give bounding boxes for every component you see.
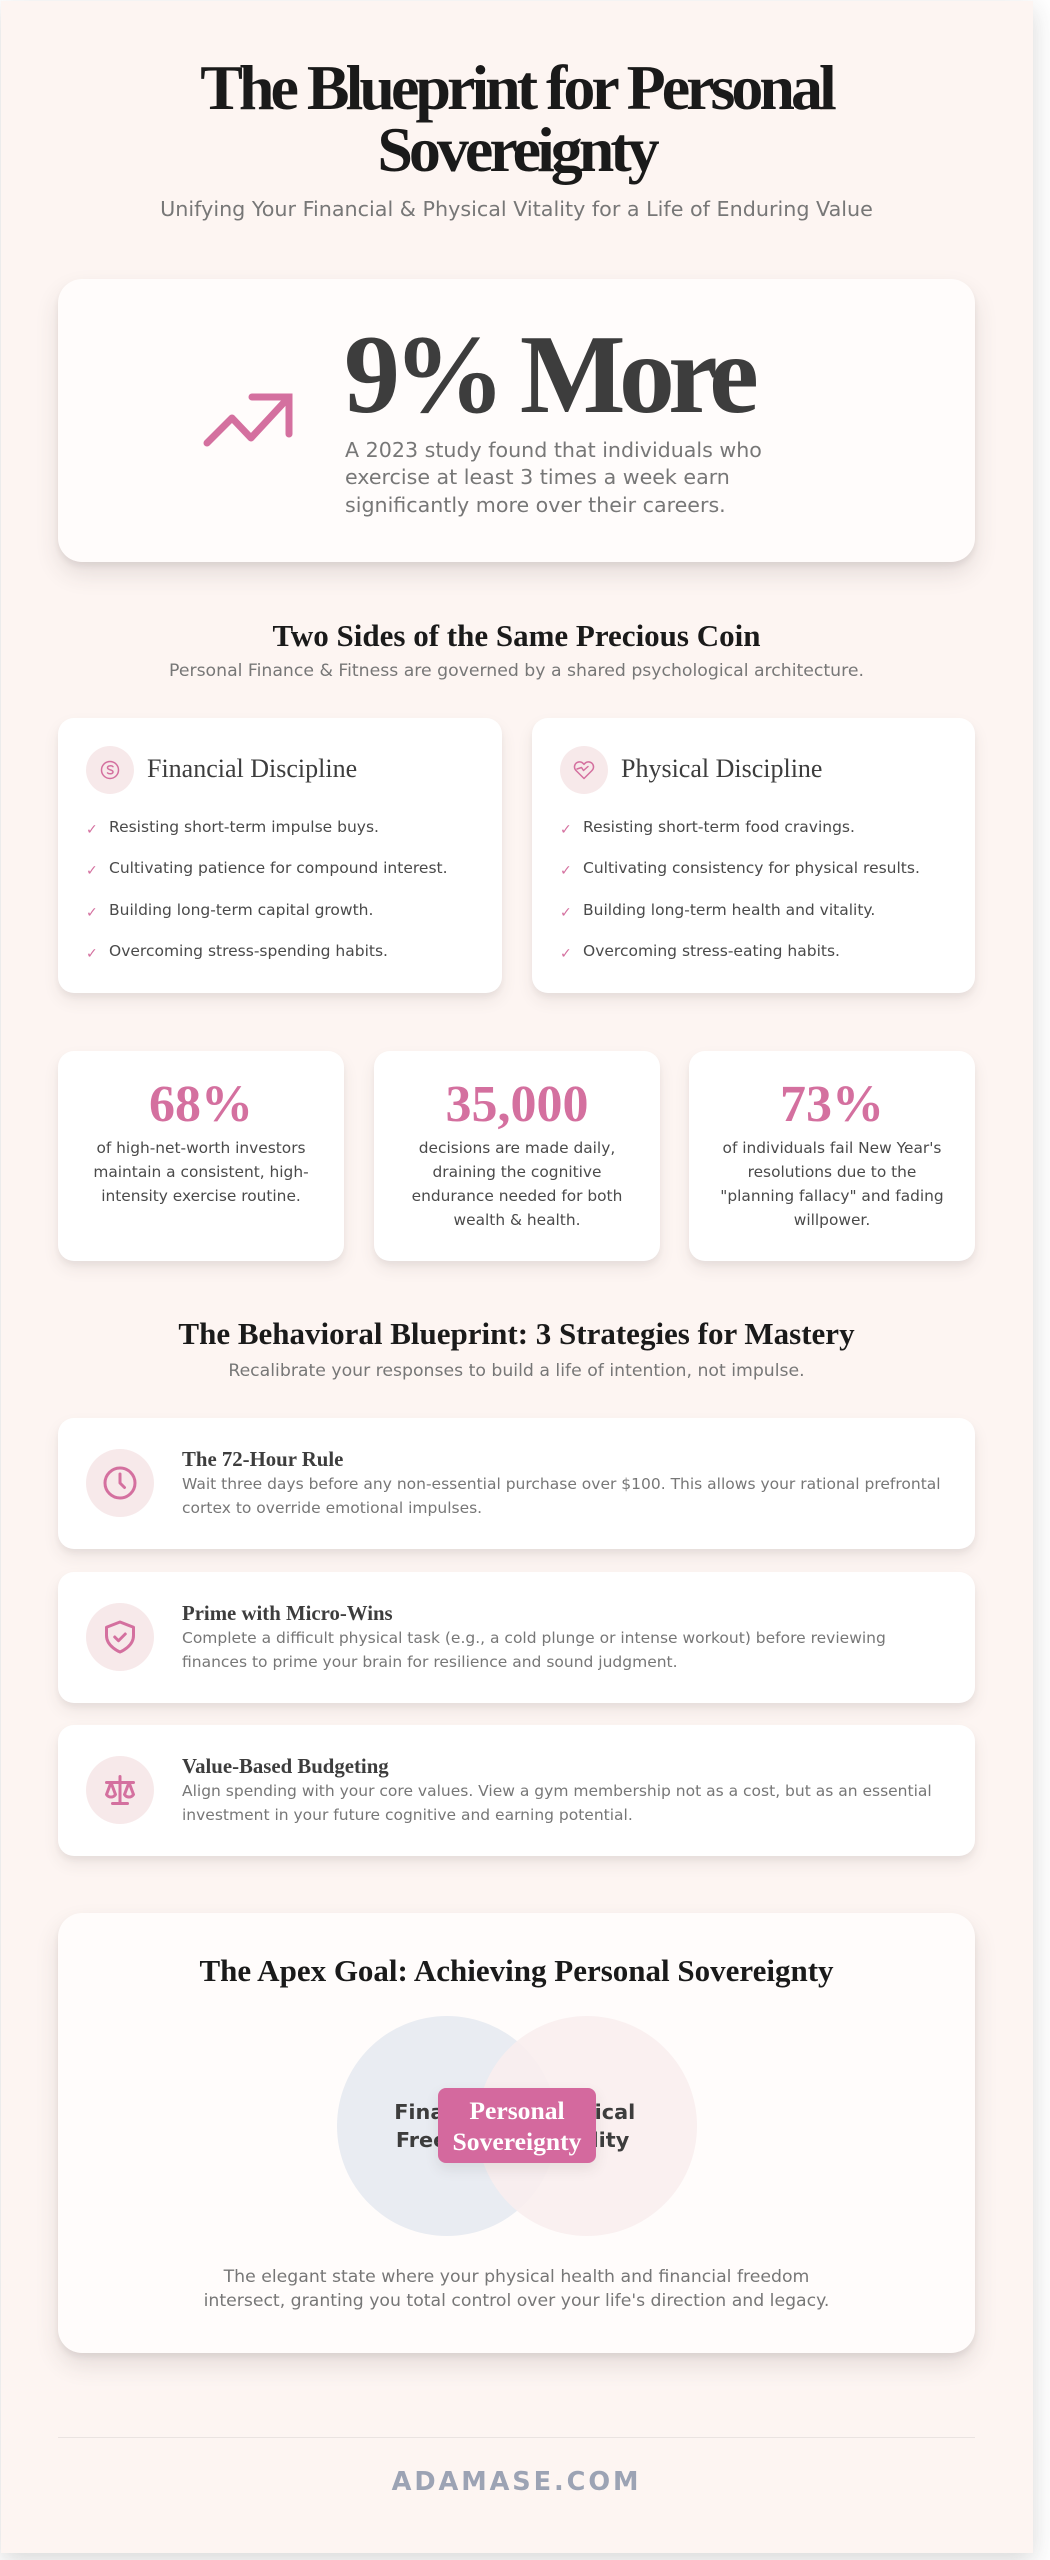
stat description: maintain a consistent, high- <box>93 1163 309 1181</box>
panel: financial discipline: ✓ <box>86 863 98 879</box>
checklist: Building long-term health and vitality. <box>583 901 875 919</box>
checklist: Building long-term capital growth. <box>109 901 373 919</box>
panel: physical discipline: ✓ <box>560 946 572 962</box>
stat description <box>93 1139 309 1205</box>
panel: physical discipline: ✓ <box>560 822 572 838</box>
panel: financial discipline <box>58 718 502 993</box>
subheading: strategies: Recalibrate your responses to build a life of intention, not impulse. <box>228 1361 805 1381</box>
stat card: 68% <box>58 1051 344 1261</box>
title <box>200 52 836 185</box>
stat description: resolutions due to the <box>748 1163 916 1181</box>
stat description: intensity exercise routine. <box>101 1187 301 1205</box>
card heading: Financial Discipline <box>147 754 357 783</box>
panel: financial discipline: ✓ <box>86 905 98 921</box>
heading: strategies: The Behavioral Blueprint: 3 Strategies for Mastery <box>178 1316 855 1351</box>
stat description: of individuals fail New Year's <box>723 1139 941 1157</box>
venn circle: financial freedom <box>337 2016 557 2236</box>
subheading: two sides: Personal Finance & Fitness are governed by a shared psychological architecture. <box>169 661 864 681</box>
card heading: Physical Discipline <box>621 754 822 783</box>
footer brand: ADAMASE.COM <box>392 2467 641 2497</box>
stat description: endurance needed for both <box>412 1187 622 1205</box>
venn centre badge <box>438 2088 596 2163</box>
checklist: Cultivating consistency for physical results. <box>583 859 920 877</box>
icon: clock <box>86 1449 154 1517</box>
hero number: 9% More <box>344 313 752 437</box>
panel: physical discipline <box>532 718 975 993</box>
strategy description: Wait three days before any non-essential purchase over $100. This allows your rational prefrontal <box>182 1475 941 1493</box>
strategy title: The 72-Hour Rule <box>182 1448 343 1471</box>
stat description: "planning fallacy" and fading <box>720 1187 944 1205</box>
venn circle: physical vitality: Vitality <box>545 2128 629 2152</box>
strategy card: 72-hour rule <box>58 1418 975 1549</box>
stat description: draining the cognitive <box>433 1163 601 1181</box>
strategy description: investment in your future cognitive and earning potential. <box>182 1806 633 1824</box>
checklist <box>560 818 920 962</box>
strategy title: Value-Based Budgeting <box>182 1755 389 1778</box>
strategy description: Align spending with your core values. View a gym membership not as a cost, but as an essential <box>182 1782 932 1800</box>
hero description: significantly more over their careers. <box>345 493 726 517</box>
icon: heart <box>560 746 608 794</box>
stat number: 68% <box>149 1076 253 1133</box>
venn circle: financial freedom: Freedom <box>396 2128 498 2152</box>
strategy description: cortex to override emotional impulses. <box>182 1499 482 1517</box>
panel: apex goal <box>58 1913 975 2353</box>
checklist: Overcoming stress-eating habits. <box>583 942 840 960</box>
stat card: 35,000 <box>374 1051 660 1261</box>
checklist: Overcoming stress-spending habits. <box>109 942 388 960</box>
strategy description <box>182 1475 941 1517</box>
checklist: Resisting short-term food cravings. <box>583 818 855 836</box>
hero description: exercise at least 3 times a week earn <box>345 465 730 489</box>
strategy card: micro-wins <box>58 1572 975 1703</box>
panel: financial discipline: ✓ <box>86 822 98 838</box>
stat card: 73% <box>689 1051 975 1261</box>
strategy title: Prime with Micro-Wins <box>182 1602 393 1625</box>
title: The Blueprint for Personal <box>200 52 833 123</box>
stat number: 35,000 <box>446 1076 588 1133</box>
subtitle: Unifying Your Financial & Physical Vitality for a Life of Enduring Value <box>160 197 873 221</box>
strategy description: finances to prime your brain for resilience and sound judgment. <box>182 1653 678 1671</box>
hero description: A 2023 study found that individuals who <box>345 438 762 462</box>
stat description <box>720 1139 944 1229</box>
venn centre badge: Personal <box>469 2096 565 2125</box>
venn circle: physical vitality: Physical <box>539 2100 635 2124</box>
hero description <box>345 438 762 517</box>
icon: scale <box>86 1756 154 1824</box>
panel: financial discipline: ✓ <box>86 946 98 962</box>
panel: physical discipline: ✓ <box>560 905 572 921</box>
stat description: willpower. <box>794 1211 870 1229</box>
panel: physical discipline: ✓ <box>560 863 572 879</box>
apex description: The elegant state where your physical health and financial freedom <box>224 2267 809 2287</box>
apex description <box>204 2267 829 2311</box>
apex heading: The Apex Goal: Achieving Personal Sovereignty <box>199 1953 834 1988</box>
venn diagram <box>337 2016 697 2236</box>
strategy description <box>182 1629 886 1671</box>
checklist: Resisting short-term impulse buys. <box>109 818 379 836</box>
stat description: decisions are made daily, <box>419 1139 615 1157</box>
stat description: wealth & health. <box>454 1211 580 1229</box>
strategy description <box>182 1782 932 1824</box>
apex description: intersect, granting you total control over your life's direction and legacy. <box>204 2291 829 2311</box>
icon: trending up <box>204 394 292 446</box>
venn centre badge: Sovereignty <box>453 2127 581 2156</box>
checklist: Cultivating patience for compound interest. <box>109 859 448 877</box>
venn circle: financial freedom: Financial <box>394 2100 500 2124</box>
panel: hero statistic <box>58 279 975 562</box>
stat description <box>412 1139 622 1229</box>
title: Sovereignty <box>377 114 656 184</box>
strategy card: value-based budgeting <box>58 1725 975 1856</box>
strategy description: Complete a difficult physical task (e.g., a cold plunge or intense workout) before reviewing <box>182 1629 886 1647</box>
checklist <box>86 818 448 962</box>
stat description: of high-net-worth investors <box>96 1139 306 1157</box>
venn circle: physical vitality <box>477 2016 697 2236</box>
icon: dollar circle <box>86 746 134 794</box>
stat number: 73% <box>780 1076 884 1133</box>
icon: shield check <box>86 1603 154 1671</box>
heading: two sides: Two Sides of the Same Precious Coin <box>273 618 760 653</box>
